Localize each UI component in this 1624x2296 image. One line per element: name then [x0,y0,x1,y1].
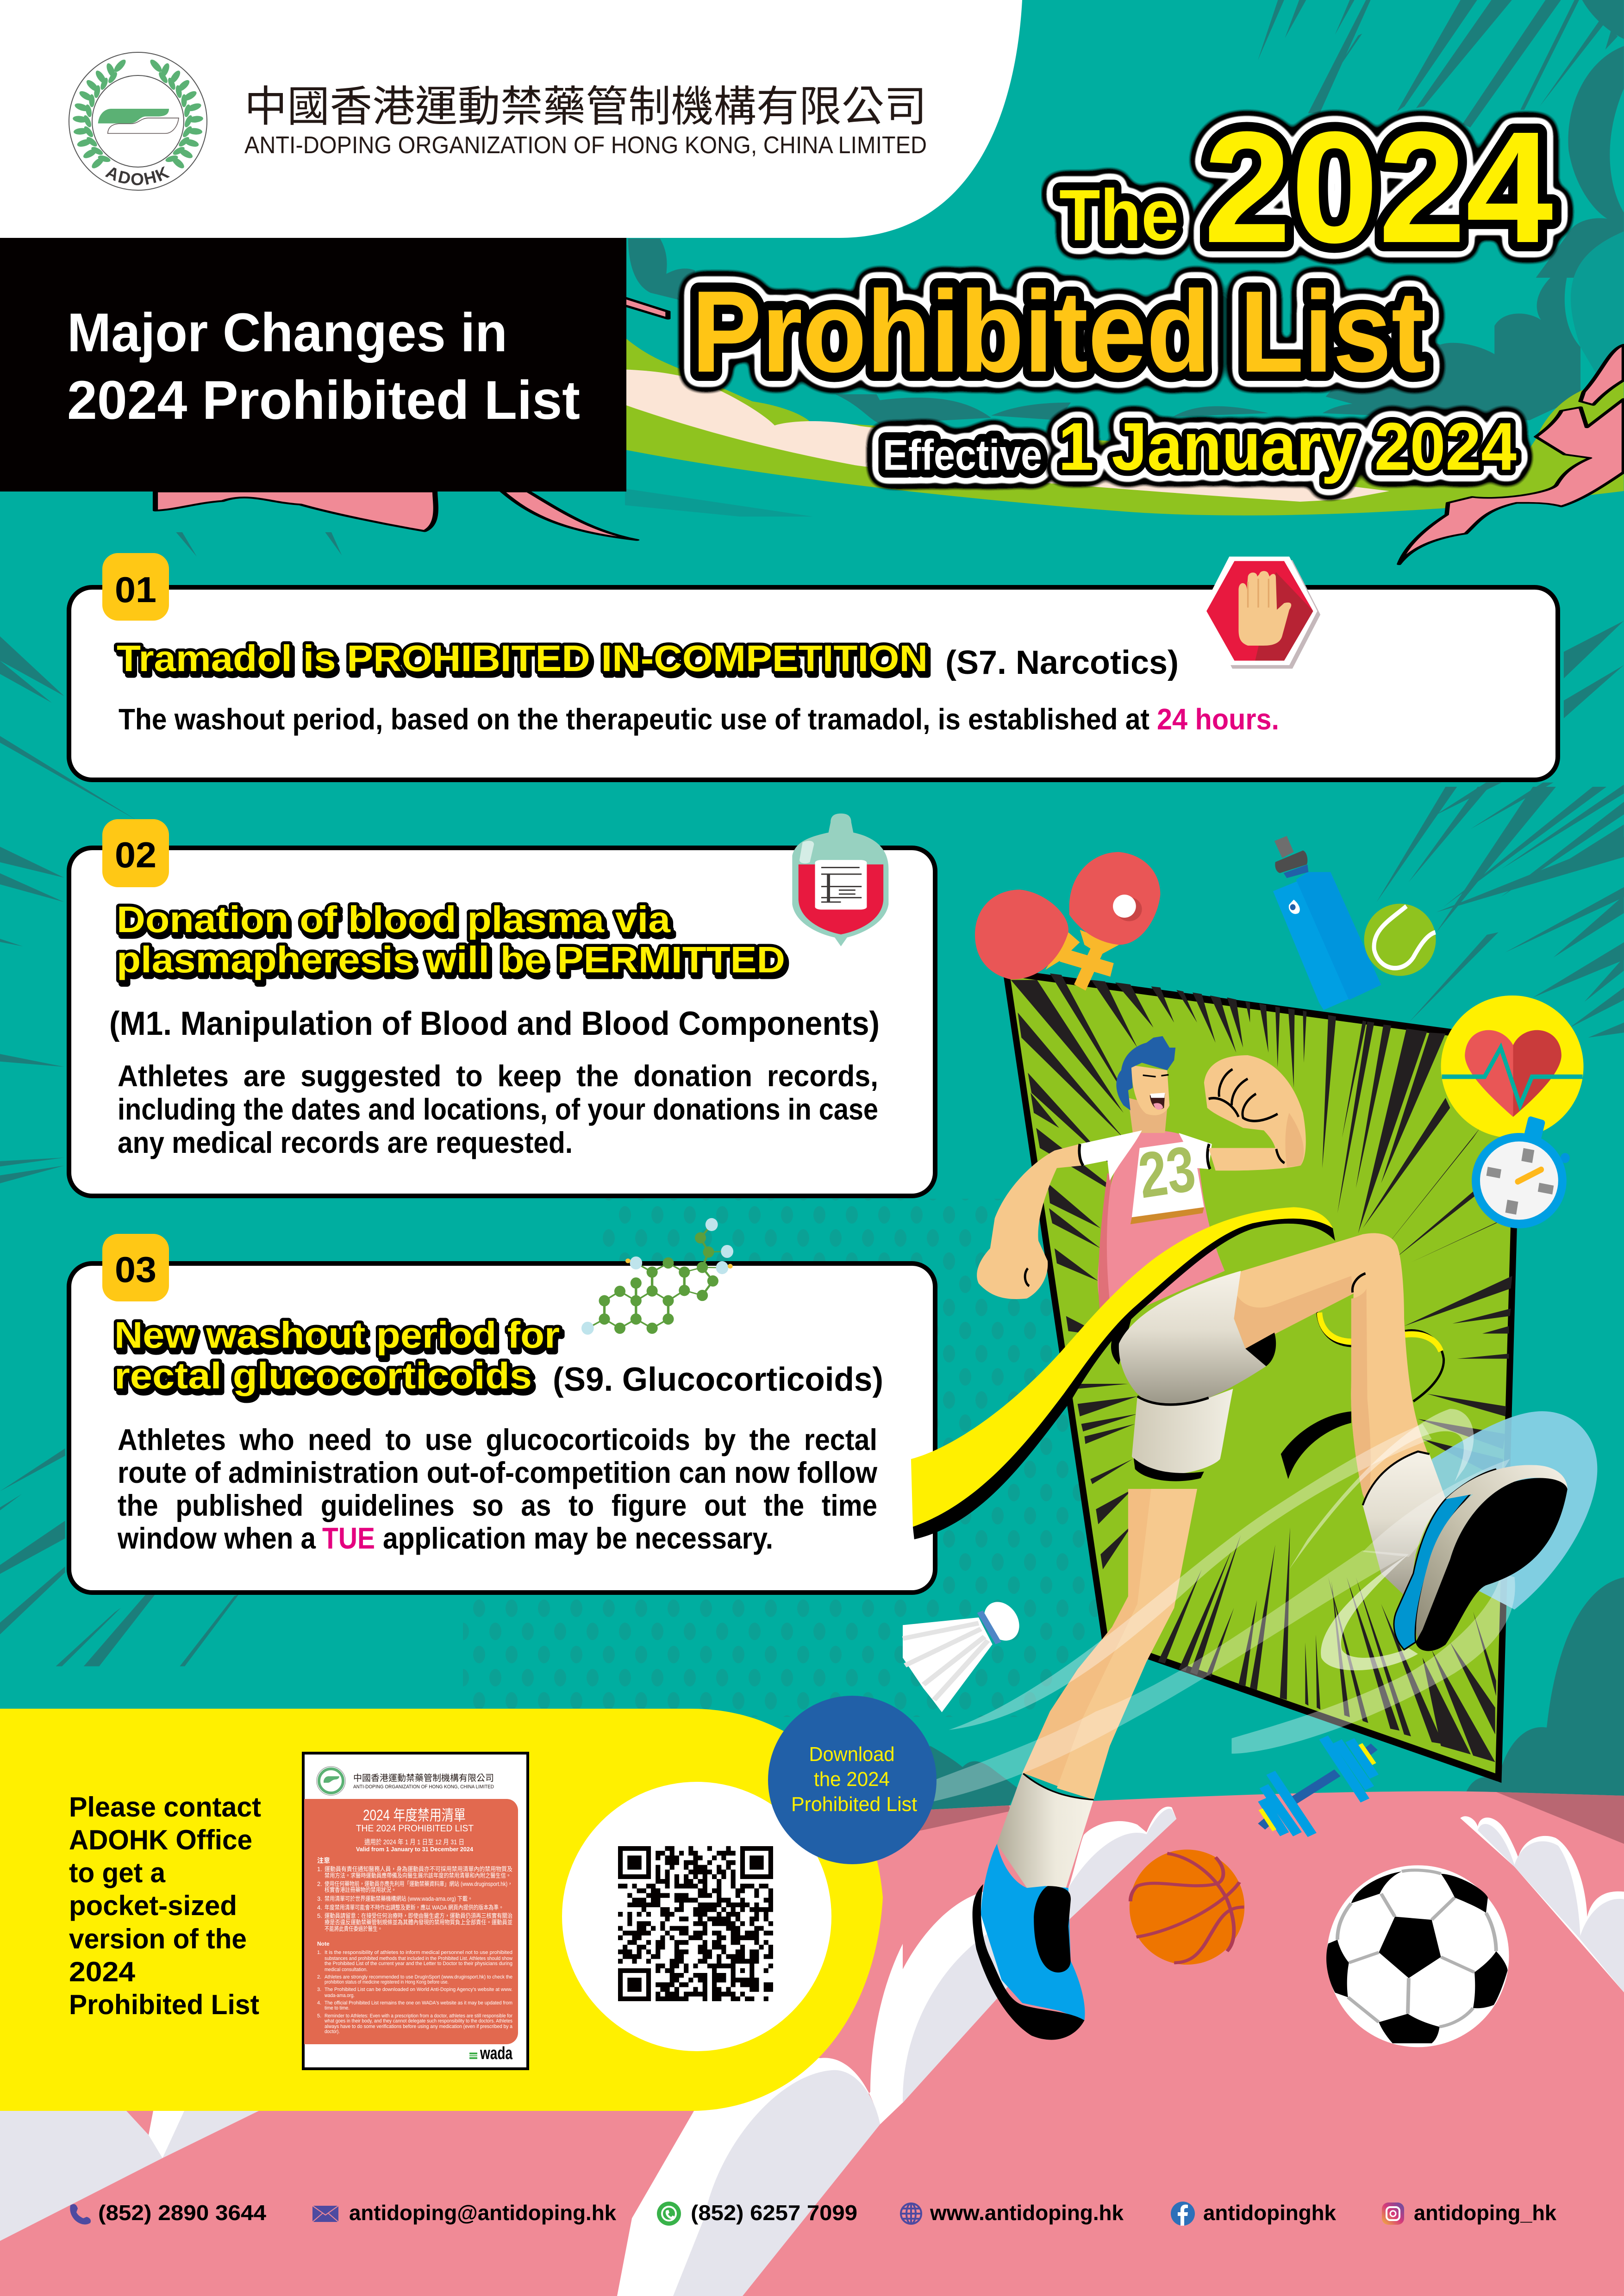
pocket card thumbnail: 注意 [317,1857,330,1864]
pocket card thumbnail: 禁用清單可於世界運動禁藥機構網站 (www.wada-ama.org) 下載。 [325,1895,473,1902]
pocket card thumbnail: prohibition status of medicine registered in Hong Kong before use. [325,1979,449,1985]
badge 01 [102,553,169,621]
icon: stop hand sign [1201,557,1320,669]
laurel wreath [72,58,204,170]
icon: tennis ball [1364,904,1436,976]
card 01 heading: Tramadol is PROHIBITED IN-COMPETITION [117,638,928,679]
download badge: Download [809,1743,894,1766]
halftone dots [463,1199,1097,1717]
badge 03: 03 [115,1249,156,1290]
pocket card thumbnail: Athletes are strongly recommended to use DrugInSport (www.druginsport.hk) to check the [325,1974,512,1980]
icon: mail [312,2206,338,2222]
pocket card thumbnail: 5. [317,2013,321,2019]
supporting leg [973,1489,1197,2040]
card 02 heading [117,899,785,980]
pocket card thumbnail: Reminder to Athletes: Even with a prescription from a doctor, athletes are still responsible for [325,2013,512,2019]
card 02 heading: Donation of blood plasma via [117,899,671,940]
pocket card thumbnail: 3. [317,1987,321,1992]
title: Effective: Effective [883,431,1042,479]
pocket card thumbnail: time to time. [325,2005,350,2011]
pocket card thumbnail: 適用於 2024 年 1 月 1 日至 12 月 31 日 [364,1838,464,1846]
phone number: (852) 2890 3644 [98,2201,266,2225]
icon: basketball [1130,1849,1244,1965]
contact text: Please contact [69,1792,261,1823]
contact text: Prohibited List [69,1989,259,2020]
pocket card thumbnail: Valid from 1 January to 31 December 2024 [356,1846,474,1853]
title: The: The [1059,175,1179,256]
icon: instagram [1382,2203,1404,2225]
icon: blood bag [792,814,888,946]
icon: molecule [581,1218,733,1335]
badge 02: 02 [115,834,156,875]
pink claws [156,297,1624,564]
panel: card 03 [69,1218,935,1593]
icon: table tennis bats [975,852,1160,988]
burst rays [1011,973,1512,1569]
panel: card 01 [69,553,1558,780]
far bushes [765,1577,1624,1834]
white header panel [0,0,1022,238]
shorts [1245,1332,1276,1367]
right arm and fist [1204,1055,1306,1170]
illustration: raised running shoe [1394,1465,1568,1651]
pocket card thumbnail: doctor). [325,2029,340,2035]
pocket card thumbnail: THE 2024 PROHIBITED LIST [356,1823,474,1834]
thumbnail logo [317,1767,345,1795]
illustration: translucent swooshes [903,1409,1515,1807]
ADOHK logo [69,52,207,190]
black heading box [0,238,626,492]
illustration: light blue swoosh behind foot [1432,1411,1597,1610]
left arm [977,1144,1082,1299]
pocket card thumbnail: 不能將此責任委過於醫生。 [325,1925,382,1932]
contact text: pocket-sized [69,1890,237,1921]
pocket card thumbnail: 1. [317,1950,321,1955]
contact text: version of the [69,1923,247,1954]
pocket card thumbnail: 中國香港運動禁藥管制機構有限公司 [353,1773,494,1783]
pocket card thumbnail: 2. [317,1880,322,1887]
card 01 highlight: 24 hours. [1157,703,1279,736]
pocket card thumbnail: 使用任何藥物前，運動員亦應先利用「運動禁藥資料庫」網站 (www.druginsport.hk)， [325,1880,512,1887]
pocket card thumbnail: 4. [317,2000,321,2006]
illustration: runner [911,1036,1445,2040]
pocket card thumbnail: The official Prohibited List remains the one on WADA's website as it may be updated from [325,2000,512,2006]
neck and head [1128,1098,1167,1133]
pocket card thumbnail: 1. [317,1866,322,1873]
card 02 heading: plasmapheresis will be PERMITTED [117,939,785,980]
icon: soccer ball [1326,1865,1509,2047]
pocket card thumbnail: medical consultation. [325,1967,368,1972]
heading line 2: 2024 Prohibited List [67,370,580,431]
burst panel behind runner [1006,972,1519,1778]
background bushes behind title [625,231,1624,516]
card 02 body [118,1059,878,1159]
card 03 body [117,1423,877,1555]
race bib: 23 [1135,1133,1199,1212]
thigh raised [1234,1233,1428,1505]
card 03 heading: rectal glucocorticoids [114,1355,532,1396]
pocket card thumbnail: ANTI-DOPING ORGANIZATION OF HONG KONG, CHINA LIMITED [353,1784,494,1790]
card 03 body: TUE [322,1521,375,1555]
pocket card thumbnail: 療是否違反運動禁藥管制規條並為其體內發現的禁用物質負上全部責任。運動員並 [325,1919,512,1926]
download badge: the 2024 [814,1768,890,1791]
organisation name Chinese: 中國香港運動禁藥管制機構有限公司 [244,83,927,131]
website: www.antidoping.hk [930,2201,1124,2225]
heading line 1: Major Changes in [67,302,507,363]
instagram name: antidoping_hk [1414,2201,1556,2225]
contact text: to get a [69,1857,166,1888]
icon: stopwatch [1472,1116,1570,1228]
pocket card thumbnail: 5. [317,1912,322,1919]
panel: card 02 [69,814,935,1196]
pocket card thumbnail: always have to do some verifications before using any medication (even if prescribed by a [325,2024,513,2029]
pocket card thumbnail: wada-ama.org. [324,1993,355,1998]
pocket card thumbnail: 3. [317,1895,322,1902]
icon: shuttlecock [903,1598,1025,1712]
badge 03 [102,1234,169,1301]
card 02 category: (M1. Manipulation of Blood and Blood Components) [109,1005,880,1042]
card 02 body: Athletes are suggested to keep the donation records, [118,1059,878,1093]
pocket card thumbnail: 運動員有責任通知醫務人員，身為運動員亦不可採用禁用清單內的禁用物質及 [325,1866,512,1873]
green hill and cream path [625,338,1624,516]
ADOHK logo: ADOHK [103,162,173,189]
pocket card thumbnail: It is the responsibility of athletes to inform medical personnel not to use prohibited [325,1950,512,1955]
card 02 body: including the dates and locations, of your donations in case [118,1092,878,1126]
background speed lines mid and left [0,532,1624,1666]
pocket card thumbnail [303,1753,528,2069]
card 03 heading: New washout period for [114,1314,560,1356]
sleeves [1080,1131,1142,1181]
pocket card thumbnail: The Prohibited List can be downloaded on World Anti-Doping Agency's website at www. [325,1987,512,1992]
badge 01: 01 [115,569,156,610]
email address: antidoping@antidoping.hk [349,2201,616,2225]
title: 2024: 2024 [1204,98,1554,276]
thumbnail orange panel [304,1799,518,2044]
icons around the burst [975,836,1584,1228]
contact text [69,1792,261,2020]
main title [692,98,1554,484]
icon: heart rate [1441,996,1584,1138]
pocket card thumbnail: Note [317,1941,330,1947]
wada logo: wada [480,2044,513,2063]
raised leg sock [1363,1451,1445,1599]
card 03 body: Athletes who need to use glucocorticoids by the rectal [118,1423,877,1456]
torso [1098,1130,1225,1321]
icon: dumbbell [1261,1737,1374,1835]
icon: facebook [1171,2202,1195,2226]
card 03 category: (S9. Glucocorticoids) [553,1361,883,1398]
pocket card thumbnail: 2. [317,1974,321,1980]
pocket card thumbnail: 4. [317,1904,322,1911]
pocket card thumbnail: 禁用方法。求醫時運動員應帶備及向醫生展示該年度的禁用清單和內附之醫生信。 [325,1872,511,1879]
title: Prohibited List: Prohibited List [692,267,1426,397]
card 03 body: window when a [117,1521,316,1555]
background speed lines top right [1258,0,1624,278]
pocket card thumbnail: substances and prohibited methods that included in the Prohibited List. Athletes should show [325,1956,512,1961]
icon: water bottle [1273,836,1381,1010]
wada logo [469,2044,513,2063]
burst bottom rays [1158,1527,1496,1762]
facebook name: antidopinghk [1203,2201,1336,2225]
footer contacts [70,2201,1556,2226]
download badge [768,1696,937,1864]
contact text: 2024 [69,1956,136,1987]
running track [0,1791,1624,2296]
card 03 body: the published guidelines so as to figure out the time [118,1488,877,1522]
whatsapp number: (852) 6257 7099 [691,2201,857,2225]
icon: phone [70,2204,91,2224]
badge 02 [102,819,169,887]
track mounds [880,1807,1624,2103]
icon: globe [901,2203,921,2224]
download badge: Prohibited List [791,1793,917,1816]
QR code on white circle [562,1782,831,2051]
title: date: 1 January 2024 [1058,409,1517,484]
pocket card thumbnail: 2024 年度禁用清單 [363,1807,466,1823]
back ribbon [1281,1308,1444,1479]
card 03 heading [114,1314,560,1396]
panel: yellow contact panel [0,1696,937,2111]
pocket card thumbnail: 運動員請留意：在接受任何治療時，即使由醫生處方，運動員仍須再三核實有關治 [325,1912,512,1919]
pocket card thumbnail: what goes in their body, and they cannot delegate such responsibility to the doctors. Athletes [324,2018,512,2024]
pocket card thumbnail: the Prohibited List of the current year and the Letter to Doctor to their physicians during [325,1961,512,1966]
icon: whatsapp [657,2202,681,2226]
card 02 body: any medical records are requested. [118,1126,573,1159]
organisation name English: ANTI-DOPING ORGANIZATION OF HONG KONG, CHINA LIMITED [244,132,927,159]
pocket card thumbnail: 核實香港註冊藥物的禁用狀況。 [325,1886,396,1893]
card 01 body: The washout period, based on the therapeutic use of tramadol, is established at [119,703,1149,736]
contact text: ADOHK Office [69,1824,252,1855]
ribbon [913,1219,1335,1539]
card 01 category: (S7. Narcotics) [945,644,1179,681]
card 03 body: route of administration out-of-competition can now follow [118,1456,877,1489]
pocket card thumbnail: 年度禁用清單可能會不時作出調整及更新，應以 WADA 網頁內提供的版本為準。 [325,1904,504,1911]
card 03 body: application may be necessary. [383,1521,773,1555]
